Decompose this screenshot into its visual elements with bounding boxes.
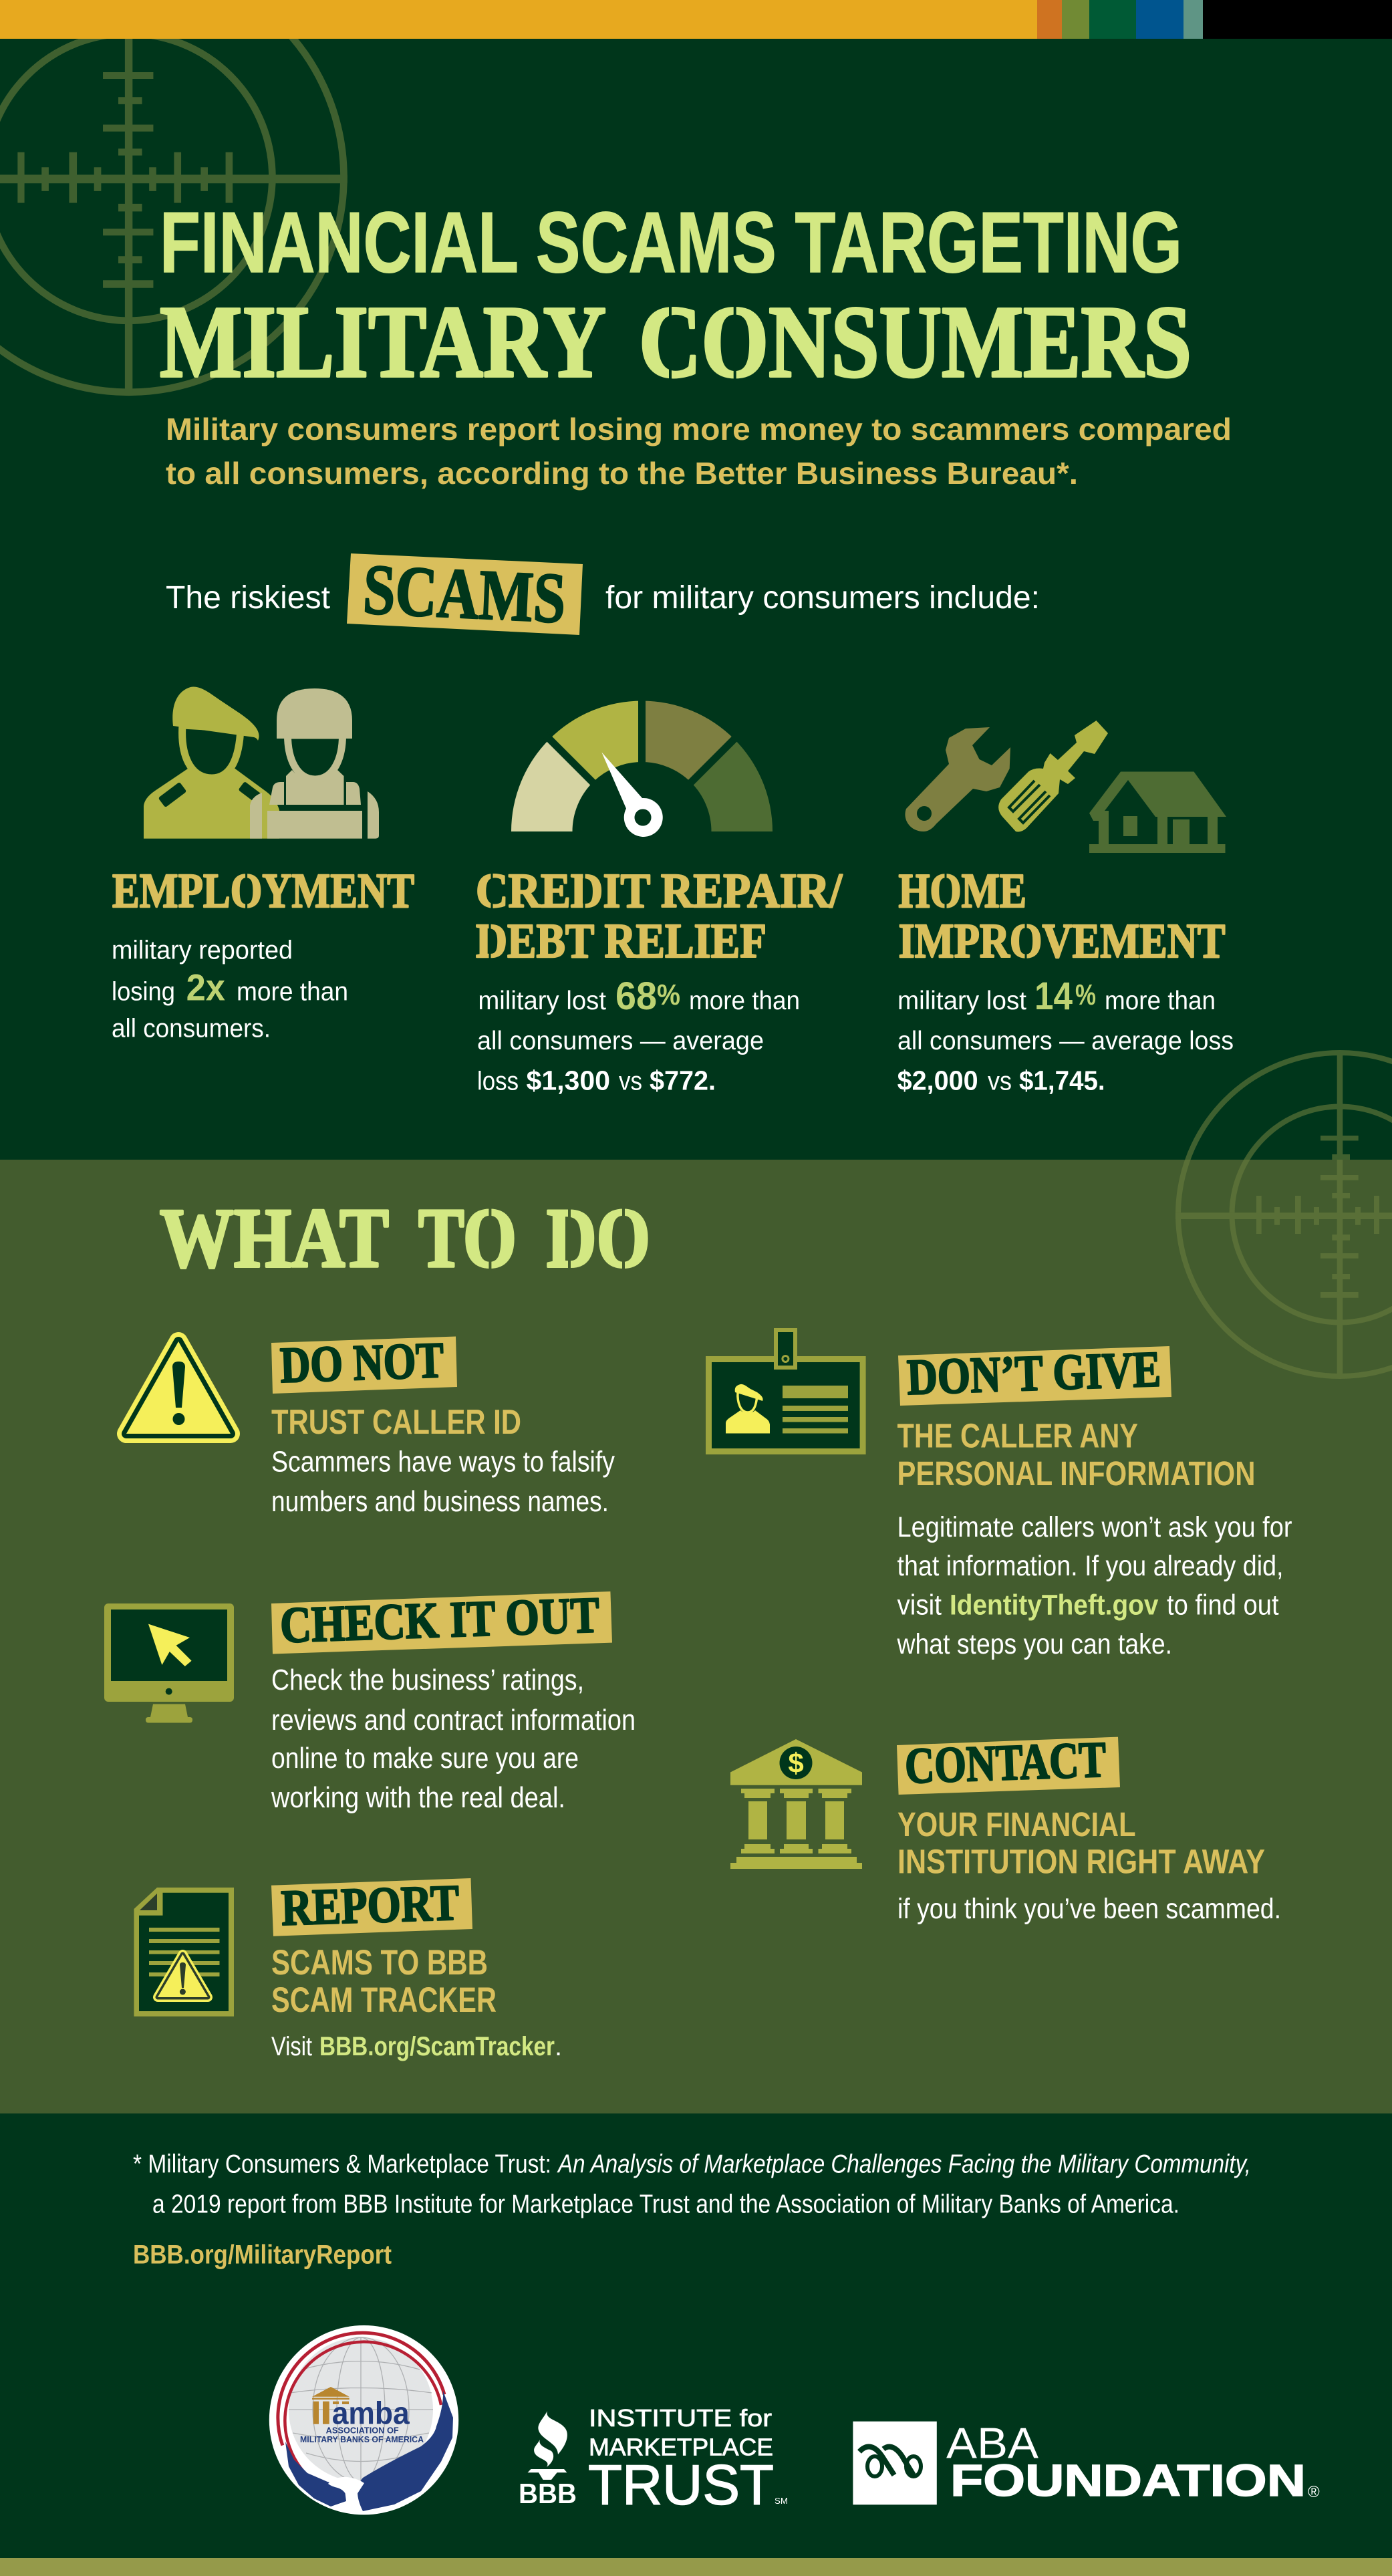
text: all consumers. xyxy=(112,1015,271,1043)
text: % xyxy=(657,979,680,1011)
logo: bbb institute for marketplace trust: INSTITUTE for xyxy=(589,2404,772,2432)
footnote: * Military Consumers & Marketplace Trust: xyxy=(133,2150,551,2179)
logo: aba foundation: FOUNDATION xyxy=(950,2456,1306,2506)
text: Visit xyxy=(271,2032,312,2061)
text: numbers and business names. xyxy=(271,1485,609,1518)
text: military reported xyxy=(112,936,293,965)
heading: INSTITUTION RIGHT AWAY xyxy=(897,1843,1265,1881)
text xyxy=(897,975,1234,1096)
logo: bbb institute for marketplace trust: MARKETPLACE xyxy=(589,2433,773,2460)
text: $1,300 xyxy=(527,1065,610,1096)
title: CONSUMERS xyxy=(639,285,1192,399)
text: BBB.org/ScamTracker xyxy=(319,2032,555,2061)
text: more than xyxy=(1105,987,1216,1015)
icon: id badge xyxy=(708,1330,863,1452)
heading xyxy=(897,1805,1265,1881)
heading: what to do: WHAT xyxy=(160,1192,389,1285)
text xyxy=(897,1511,1292,1660)
text: Check the business’ ratings, xyxy=(271,1664,584,1696)
subtitle xyxy=(166,412,1232,491)
logo: amba: ASSOCIATION OF xyxy=(326,2426,399,2436)
panel: home improvement xyxy=(897,721,1234,1096)
text: IdentityTheft.gov xyxy=(950,1589,1158,1622)
tip: don't give xyxy=(708,1330,1292,1660)
heading: IMPROVEMENT xyxy=(898,914,1226,968)
logo: aba foundation: ABA xyxy=(946,2419,1039,2468)
text: more than xyxy=(689,987,800,1015)
text: more than xyxy=(237,977,348,1007)
text: working with the real deal. xyxy=(271,1781,565,1814)
text: vs xyxy=(988,1067,1012,1096)
logo: amba: MILITARY BANKS OF AMERICA xyxy=(300,2434,424,2444)
heading xyxy=(897,1417,1255,1493)
text: loss xyxy=(477,1067,519,1096)
title xyxy=(160,195,1192,399)
text: $2,000 xyxy=(897,1065,978,1096)
text: Legitimate callers won’t ask you for xyxy=(897,1511,1292,1543)
text: 14 xyxy=(1034,975,1073,1018)
text: Scammers have ways to falsify xyxy=(271,1445,615,1478)
riskiest scams line xyxy=(166,550,1040,638)
panel: employment xyxy=(112,687,414,1043)
riskiest scams line: The riskiest xyxy=(166,580,330,616)
text: all consumers — average xyxy=(477,1027,764,1055)
icon: monitor xyxy=(104,1603,234,1723)
stamp: contact: CONTACT xyxy=(904,1732,1107,1794)
panel: what to do background xyxy=(0,1160,1392,2113)
icon: wrench xyxy=(905,727,1010,831)
text: military lost xyxy=(897,987,1026,1015)
text: $772. xyxy=(650,1065,716,1096)
tip: do not trust caller id xyxy=(126,1332,615,1518)
heading: CREDIT REPAIR/ xyxy=(476,864,843,918)
icon: gauge xyxy=(511,698,773,837)
text: visit xyxy=(897,1589,942,1622)
text xyxy=(112,936,348,1043)
text: what steps you can take. xyxy=(897,1628,1172,1660)
stamp: don't give: DON’T GIVE xyxy=(906,1341,1161,1406)
crosshair right xyxy=(1175,1053,1392,1376)
subtitle: to all consumers, according to the Better Business Bureau*. xyxy=(166,456,1078,491)
heading: what to do xyxy=(160,1192,650,1285)
riskiest scams line: for military consumers include: xyxy=(605,580,1040,616)
subtitle: Military consumers report losing more money to scammers compared xyxy=(166,412,1232,446)
text xyxy=(271,1445,615,1518)
logo: amba xyxy=(269,2325,458,2515)
icon: warning xyxy=(126,1341,231,1434)
top colour bar xyxy=(0,0,1392,39)
text: all consumers — average loss xyxy=(897,1027,1234,1055)
text: reviews and contract information xyxy=(271,1704,636,1736)
footnote xyxy=(133,2150,1251,2270)
icon: soldiers xyxy=(144,687,379,839)
icon: house xyxy=(1089,771,1226,853)
stamp: do not: DO NOT xyxy=(279,1332,444,1394)
logo: bbb institute for marketplace trust xyxy=(519,2404,788,2517)
stamp: check it out: CHECK IT OUT xyxy=(279,1587,600,1654)
stamp: report: REPORT xyxy=(280,1875,460,1936)
logo: aba foundation: ® xyxy=(1308,2483,1320,2501)
logo: bbb institute for marketplace trust: TRUST xyxy=(588,2454,774,2517)
heading: HOME xyxy=(898,864,1026,918)
logo: bbb institute for marketplace trust: SM xyxy=(775,2496,788,2506)
icon: document with warning xyxy=(134,1888,234,2017)
heading: what to do: DO xyxy=(547,1192,650,1285)
text: that information. If you already did, xyxy=(897,1550,1283,1582)
crosshair top left xyxy=(0,0,347,392)
heading: EMPLOYMENT xyxy=(112,864,414,918)
heading: SCAM TRACKER xyxy=(271,1980,497,2020)
text xyxy=(477,975,800,1096)
text: military lost xyxy=(478,987,606,1015)
tip: check it out xyxy=(104,1587,636,1814)
heading: SCAMS TO BBB xyxy=(271,1943,488,1982)
tip: report xyxy=(134,1875,562,2061)
text: 2x xyxy=(186,967,225,1008)
heading: THE CALLER ANY xyxy=(897,1417,1138,1455)
tip: contact xyxy=(730,1732,1281,1925)
logo: aba foundation xyxy=(853,2419,1320,2506)
text xyxy=(271,1664,636,1814)
text: $1,745. xyxy=(1019,1065,1105,1096)
heading xyxy=(898,864,1226,968)
bottom bar xyxy=(0,2558,1392,2576)
logo: bbb institute for marketplace trust: BBB xyxy=(519,2478,577,2509)
icon: screwdriver xyxy=(998,721,1108,831)
icon: bank xyxy=(730,1739,862,1869)
text: if you think you’ve been scammed. xyxy=(897,1893,1281,1925)
text: to find out xyxy=(1167,1589,1279,1622)
heading: PERSONAL INFORMATION xyxy=(897,1454,1255,1493)
text: vs xyxy=(619,1067,642,1096)
footnote: An Analysis of Marketplace Challenges Facing the Military Community, xyxy=(557,2150,1251,2179)
heading xyxy=(476,864,843,968)
heading: DEBT RELIEF xyxy=(476,914,767,968)
footnote: a 2019 report from BBB Institute for Marketplace Trust and the Association of Military Banks of America. xyxy=(152,2190,1179,2219)
footnote: BBB.org/MilitaryReport xyxy=(133,2240,392,2270)
icon: bank: $ xyxy=(788,1747,804,1779)
heading: what to do: TO xyxy=(418,1192,517,1285)
text: % xyxy=(1075,979,1096,1011)
riskiest scams line: SCAMS xyxy=(362,550,567,638)
text: 68 xyxy=(615,975,657,1018)
text: online to make sure you are xyxy=(271,1742,579,1775)
heading xyxy=(271,1943,497,2020)
text: . xyxy=(555,2032,562,2061)
logo: amba: amba xyxy=(332,2396,410,2431)
heading: TRUST CALLER ID xyxy=(271,1403,521,1442)
title: MILITARY xyxy=(160,285,606,399)
text: losing xyxy=(112,977,175,1007)
panel: credit repair xyxy=(476,698,843,1096)
heading: YOUR FINANCIAL xyxy=(897,1805,1136,1843)
